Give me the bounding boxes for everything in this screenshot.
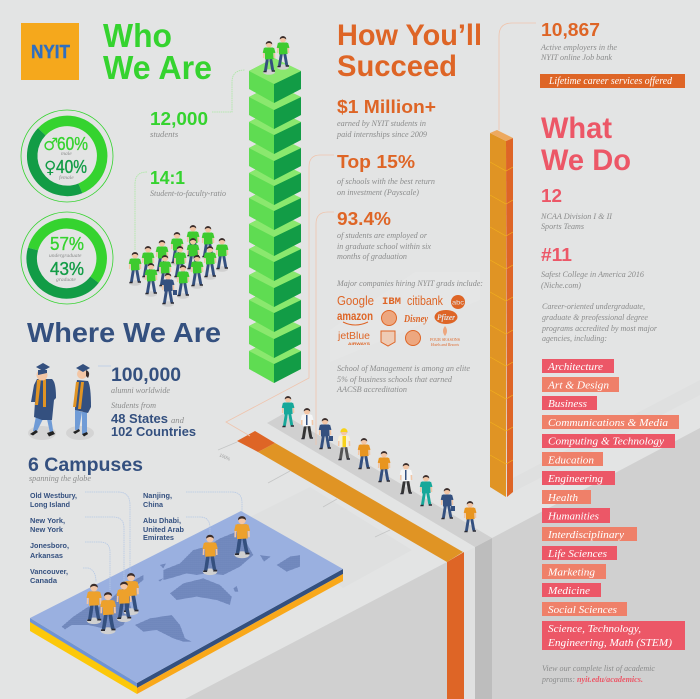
stat: #11 safest college: #11 bbox=[541, 244, 572, 265]
text: School of Management: 5% of business schools that earned bbox=[337, 374, 453, 384]
program list: Art & Design bbox=[547, 380, 610, 392]
stat: 100,000 alumni: 102 Countries bbox=[111, 424, 196, 439]
donut: male female: male bbox=[61, 151, 72, 157]
map platform bbox=[30, 511, 343, 694]
floor scale ticks bbox=[218, 442, 390, 537]
campus labels: Long Island bbox=[30, 500, 70, 509]
donut: male female: 40% bbox=[56, 157, 87, 177]
company logos: Google bbox=[337, 293, 374, 308]
stat: 14:1 ratio: Student-to-faculty-ratio bbox=[150, 188, 227, 198]
donut: male female bbox=[21, 110, 113, 202]
row of professionals bbox=[282, 396, 476, 535]
donut: undergraduate graduate: graduate bbox=[56, 277, 76, 283]
campus labels: New York bbox=[30, 525, 64, 534]
floor scale ticks: 100% bbox=[219, 452, 231, 462]
program list: Health bbox=[547, 492, 578, 504]
campus labels: Emirates bbox=[143, 533, 174, 542]
floor and wall planes bbox=[185, 272, 700, 699]
green block tower bbox=[249, 58, 301, 383]
program list: Interdisciplinary bbox=[547, 529, 624, 541]
company logos: FOUR SEASONS bbox=[430, 337, 460, 342]
stat: 100,000 alumni: alumni worldwide bbox=[111, 385, 170, 395]
program list: Architecture bbox=[547, 361, 603, 373]
company logos bbox=[337, 293, 465, 347]
campus labels: New York, bbox=[30, 516, 65, 525]
company logos: amazon bbox=[337, 309, 373, 323]
stat: $1 Million+: paid internships since 2009 bbox=[336, 129, 428, 139]
title: What We Do: We Do bbox=[541, 144, 631, 177]
campus labels: Old Westbury, bbox=[30, 491, 77, 500]
stat: 100,000 alumni: Students from bbox=[111, 400, 156, 410]
program list: Medicine bbox=[547, 585, 590, 597]
company logos: jetBlue bbox=[337, 330, 370, 342]
campus labels: Canada bbox=[30, 576, 58, 585]
stat: $1 Million+ bbox=[336, 96, 436, 139]
stat: $1 Million+: earned by NYIT students in bbox=[337, 118, 426, 128]
campus labels bbox=[30, 491, 184, 585]
campus labels: Jonesboro, bbox=[30, 541, 69, 550]
stat: Top 15%: on investment (Payscale) bbox=[337, 187, 419, 197]
text: career-oriented programs: graduate & preofessional degree bbox=[542, 312, 648, 322]
stat: Top 15% bbox=[226, 151, 435, 436]
donut: undergraduate graduate: 57% bbox=[50, 234, 84, 254]
program list: Engineering, Math (STEM) bbox=[547, 637, 672, 649]
donut: male female: ♀ bbox=[44, 158, 56, 178]
orange column bbox=[490, 130, 513, 497]
company logos: Disney bbox=[403, 314, 428, 325]
text: career-oriented programs: agencies, including: bbox=[542, 333, 607, 343]
text: School of Management: School of Management is among an elite bbox=[337, 363, 470, 373]
title: How You'll Succeed bbox=[337, 19, 482, 83]
heading: 6 Campuses: spanning the globe bbox=[29, 473, 91, 483]
stat: 100,000 alumni bbox=[98, 365, 196, 439]
title: Who We Are bbox=[103, 17, 212, 86]
title: How You'll Succeed: How You’ll bbox=[337, 19, 482, 52]
company logos: Hotels and Resorts bbox=[430, 342, 459, 347]
program list: Engineering bbox=[547, 473, 603, 485]
program list: Marketing bbox=[547, 566, 596, 578]
world map bbox=[62, 532, 300, 642]
company logos: Pfizer bbox=[437, 312, 456, 322]
program list: Humanities bbox=[547, 510, 599, 522]
donut: undergraduate graduate: 43% bbox=[50, 259, 84, 279]
text: view complete list: programs: bbox=[541, 674, 575, 684]
text: School of Management: AACSB accreditation bbox=[336, 384, 407, 394]
campus labels: United Arab bbox=[143, 525, 184, 534]
heading: 6 Campuses: 6 Campuses bbox=[28, 455, 143, 476]
text: view complete list: View our complete list of academic bbox=[542, 663, 655, 673]
stat: 12 sports teams: NCAA Division I & II bbox=[540, 211, 613, 221]
campus labels: China bbox=[143, 500, 164, 509]
donut: male female: ♂ bbox=[43, 135, 58, 155]
logo bbox=[21, 23, 79, 80]
program list: Communications & Media bbox=[548, 417, 669, 429]
banner: lifetime career services: Lifetime career services offered bbox=[548, 76, 673, 87]
program list: Education bbox=[547, 454, 595, 466]
program list: Computing & Technology bbox=[548, 436, 664, 448]
program list: Social Sciences bbox=[548, 604, 617, 616]
campus people bbox=[87, 516, 250, 634]
text: view complete list: nyit.edu/academics. bbox=[577, 674, 643, 684]
stat: Top 15%: of schools with the best return bbox=[337, 176, 435, 186]
text: view complete list bbox=[541, 663, 655, 684]
stat: 14:1 ratio bbox=[135, 167, 227, 250]
text: career-oriented programs bbox=[541, 301, 658, 343]
campus labels: Nanjing, bbox=[143, 491, 172, 500]
company logos: AIRWAYS bbox=[348, 341, 370, 346]
stat: #11 safest college bbox=[541, 244, 645, 290]
donut: male female: 60% bbox=[57, 134, 88, 154]
title: Who We Are: We Are bbox=[103, 49, 212, 86]
stat: 100,000 alumni: and bbox=[171, 415, 185, 425]
donut: undergraduate graduate: undergraduate bbox=[49, 253, 82, 259]
title: Who We Are: Who bbox=[103, 17, 172, 54]
campus labels: Abu Dhabi, bbox=[143, 516, 181, 525]
floor orange strip bbox=[237, 431, 463, 562]
stat: 93.4%: of students are employed or bbox=[337, 230, 428, 240]
donut: male female: female bbox=[59, 174, 74, 181]
banner: lifetime career services bbox=[540, 74, 685, 88]
stat: 10,867 employers: Active employers in the bbox=[540, 42, 617, 52]
stat: 12,000 students: 12,000 bbox=[150, 108, 208, 129]
title: What We Do bbox=[541, 112, 631, 177]
stat: 93.4%: 93.4% bbox=[337, 208, 391, 229]
logo: NYIT bbox=[31, 42, 70, 62]
text: career-oriented programs: Career-oriented undergraduate, bbox=[542, 301, 645, 311]
stat: 93.4%: months of graduation bbox=[337, 251, 407, 261]
stat: 100,000 alumni: 48 States bbox=[111, 411, 168, 426]
campus connectors bbox=[83, 492, 242, 590]
program list: Life Sciences bbox=[547, 548, 607, 560]
program list: Science, Technology, bbox=[548, 623, 641, 635]
company logos: abc bbox=[452, 300, 464, 306]
stat: Top 15%: Top 15% bbox=[337, 151, 415, 172]
stat: 12 sports teams bbox=[540, 185, 613, 231]
stat: 93.4% bbox=[316, 208, 431, 445]
program list bbox=[542, 359, 685, 650]
stat: 14:1 ratio: 14:1 bbox=[150, 167, 185, 188]
stat: 10,867 employers: NYIT online Job bank bbox=[540, 52, 612, 62]
stat: 12 sports teams: Sports Teams bbox=[541, 221, 585, 231]
stat: 93.4%: in graduate school within six bbox=[337, 241, 431, 251]
stat: 12 sports teams: 12 bbox=[541, 185, 562, 206]
stat: #11 safest college: Safest College in America 2016 bbox=[541, 269, 645, 279]
stat: 12,000 students bbox=[150, 70, 245, 139]
campus labels: Vancouver, bbox=[30, 567, 68, 576]
title: How You'll Succeed: Succeed bbox=[337, 50, 457, 83]
text: career-oriented programs: programs accredited by most major bbox=[541, 323, 658, 333]
program list: Business bbox=[548, 398, 587, 410]
campus labels: Arkansas bbox=[30, 551, 63, 560]
student crowd bbox=[129, 225, 228, 307]
text: major companies: Major companies hiring NYIT grads include: bbox=[336, 278, 483, 288]
title: Where We Are: Where We Are bbox=[27, 317, 221, 348]
stat: 10,867 employers bbox=[499, 20, 617, 130]
title: What We Do: What bbox=[541, 112, 612, 145]
stat: $1 Million+: $1 Million+ bbox=[337, 96, 436, 117]
stat: 10,867 employers: 10,867 bbox=[541, 20, 600, 40]
stat: #11 safest college: (Niche.com) bbox=[541, 280, 581, 290]
students on tower bbox=[263, 36, 289, 75]
graduates bbox=[28, 363, 94, 440]
text: School of Management bbox=[336, 363, 470, 394]
stat: 12,000 students: students bbox=[150, 129, 179, 139]
stat: 100,000 alumni: 100,000 bbox=[111, 365, 181, 386]
donut: undergraduate graduate bbox=[21, 212, 113, 304]
company logos: IBM bbox=[382, 297, 401, 308]
company logos: citibank bbox=[407, 294, 444, 308]
